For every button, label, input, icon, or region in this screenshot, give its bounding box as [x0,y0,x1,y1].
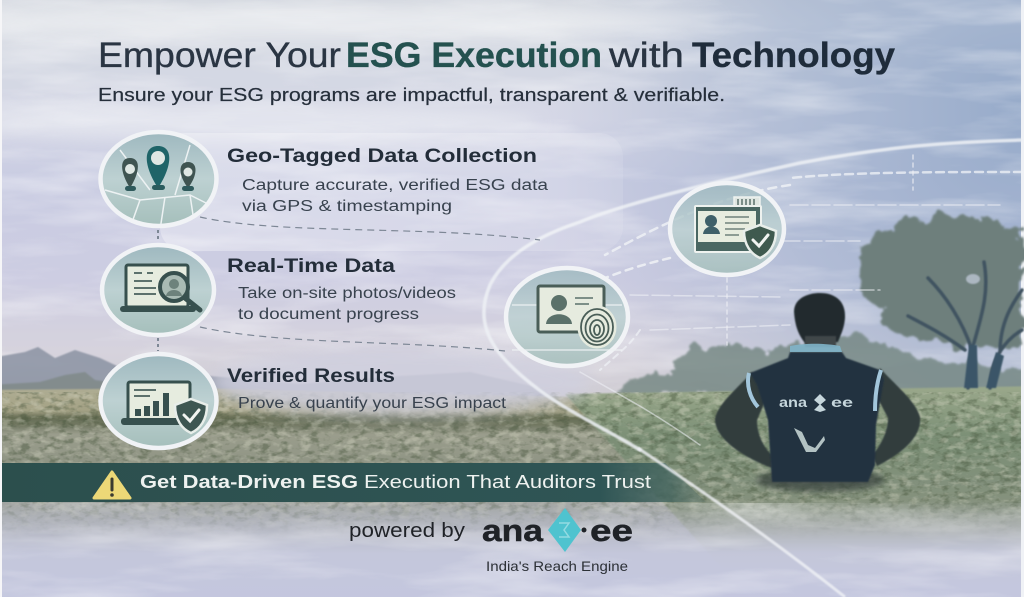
banner text [140,471,651,492]
collar [790,344,842,352]
jacket logo: ee [831,395,854,410]
lower curve of data path [638,448,845,597]
icon: ID badge with shield [670,183,784,275]
powered by logo [349,508,633,574]
mist behind lower list rows [210,348,590,416]
distant hills [0,347,560,402]
banner text: Execution That Auditors Trust [364,471,651,492]
icon: warning triangle [94,472,130,498]
feature: real-time data [102,245,456,335]
neck [805,336,836,347]
logo: anaxee [482,508,633,552]
description [238,285,456,323]
feature: verified results [100,354,507,448]
left field [0,388,860,597]
icon: laptop with magnifier [102,245,214,335]
feature: geo-tagged data collection [100,132,548,230]
description: Capture accurate, verified ESG data [242,177,548,194]
flowing data path [484,140,1022,450]
heading: Verified Results [227,366,395,387]
heading: Real-Time Data [227,256,396,277]
distant tree line [620,335,1024,400]
title: Empower Your [98,36,341,75]
tagline: India's Reach Engine [486,558,628,574]
description [242,177,548,215]
logo: anaxee: ee [590,513,633,548]
dashed connectors [158,217,540,351]
title: ESG Execution [346,36,602,75]
jacket map [794,428,825,452]
call-to-action banner [2,463,706,502]
banner text: Get Data-Driven ESG [140,471,358,492]
field texture [2,392,1021,528]
icon: identity card with fingerprint [506,268,628,366]
subtitle: Ensure your ESG programs are impactful, transparent & verifiable. [98,84,725,105]
torso [750,352,884,482]
title: Technology [692,36,896,75]
jacket logo [779,394,854,412]
powered by logo: powered by [349,520,465,542]
sleeve stripes [748,373,758,407]
heading: Geo-Tagged Data Collection [227,146,537,167]
figure: person in anaxee jacket [715,293,920,492]
icon: laptop with bar chart and shield [100,354,216,448]
title: with [608,36,684,75]
icon: map pins [100,132,216,230]
right field [565,386,1024,597]
lower mist [0,500,1024,597]
tree [857,215,1022,388]
logo: anaxee: ana [482,513,544,548]
jacket logo: ana [779,395,808,410]
translucent panel behind feature list [160,133,623,251]
description: Take on-site photos/videos [238,285,456,302]
description: Prove & quantify your ESG impact [238,395,507,412]
ground shadow [756,468,884,492]
description: to document progress [238,306,419,323]
title [98,36,896,75]
right arm [872,368,920,466]
head [794,293,845,344]
left arm [715,372,772,468]
description: via GPS & timestamping [242,198,452,215]
